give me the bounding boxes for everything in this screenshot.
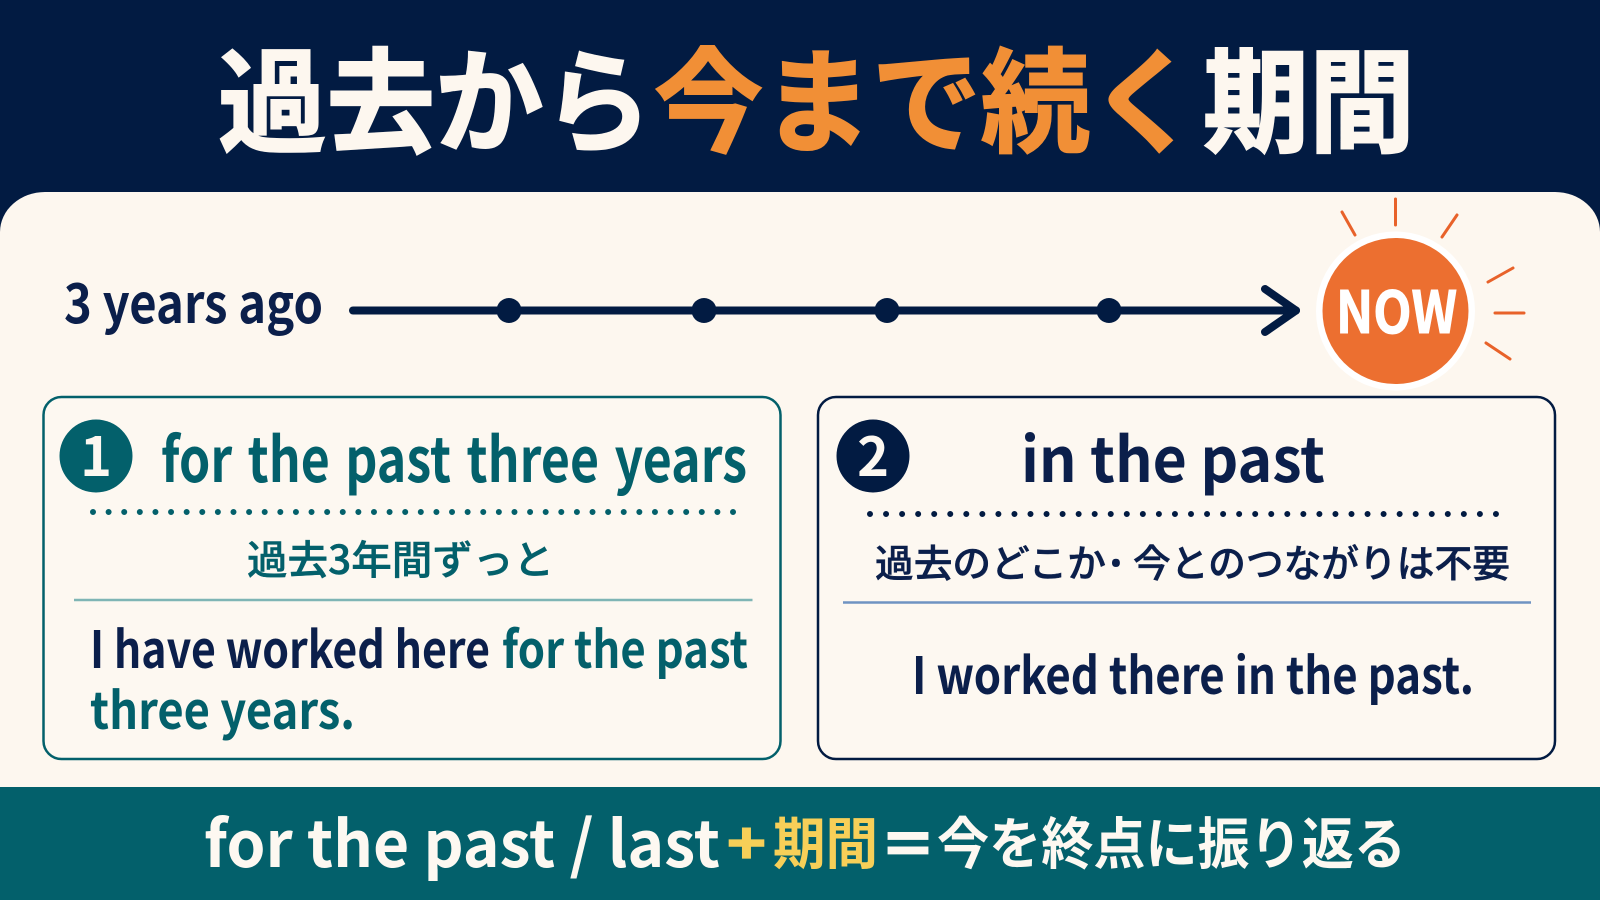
footer rule text: =: [886, 800, 930, 881]
card 2 heading: in the past: [1021, 410, 1325, 500]
title: 期間: [1203, 12, 1415, 176]
main cream panel: [0, 192, 1600, 832]
card 1 example sentence: [90, 609, 748, 744]
arrow head: [1265, 289, 1296, 332]
timeline: [64, 260, 1296, 339]
card 1 example sentence: I have worked here: [90, 609, 490, 683]
footer band: [0, 787, 1600, 900]
timeline dots: [496, 298, 1122, 323]
header band: [0, 0, 1600, 240]
card 2 example sentence: I worked there in the past.: [912, 635, 1474, 709]
title: [218, 12, 1415, 176]
card 2 border: [818, 397, 1555, 759]
badge 2: [836, 413, 910, 492]
card 1 dotted divider: [93, 509, 734, 515]
title: 今まで続く: [654, 12, 1199, 176]
footer rule text: 期間: [773, 800, 878, 881]
badge 1: 1: [80, 413, 112, 492]
card 1 example sentence: three years.: [90, 670, 355, 744]
card 1 solid divider: [74, 599, 752, 601]
card 2 Japanese meaning: ·: [1105, 533, 1127, 588]
sun rays: [1342, 199, 1524, 359]
badge ring: [1316, 232, 1475, 390]
footer rule text: +: [727, 800, 766, 881]
card 1 Japanese meaning: 過去3年間ずっと: [247, 528, 554, 586]
card 2 dotted divider: [870, 511, 1496, 517]
timeline line: [353, 306, 1296, 314]
timeline start label: 3 years ago: [64, 260, 323, 339]
card 2 Japanese meaning: [875, 533, 1510, 588]
card 2 Japanese meaning: 過去のどこか: [875, 533, 1106, 588]
card 2 Japanese meaning: 今とのつながりは不要: [1133, 533, 1510, 588]
badge 2: 2: [857, 413, 889, 492]
card 2 solid divider: [843, 601, 1531, 604]
card 2: in the past: [818, 397, 1555, 759]
card 1: for the past three years: [44, 397, 780, 759]
NOW badge: [1316, 199, 1524, 390]
badge disc: [1322, 238, 1468, 384]
footer rule text: for the past / last: [204, 794, 720, 886]
badge text: NOW: [1336, 266, 1457, 350]
card 1 heading: for the past three years: [161, 410, 747, 500]
footer rule text: [204, 794, 1406, 886]
badge 1: [60, 413, 132, 492]
card 1 example sentence: for the past: [502, 609, 748, 683]
title: 過去から: [218, 12, 652, 176]
card 1 border: [44, 397, 780, 759]
footer rule text: 今を終点に振り返る: [937, 800, 1406, 881]
